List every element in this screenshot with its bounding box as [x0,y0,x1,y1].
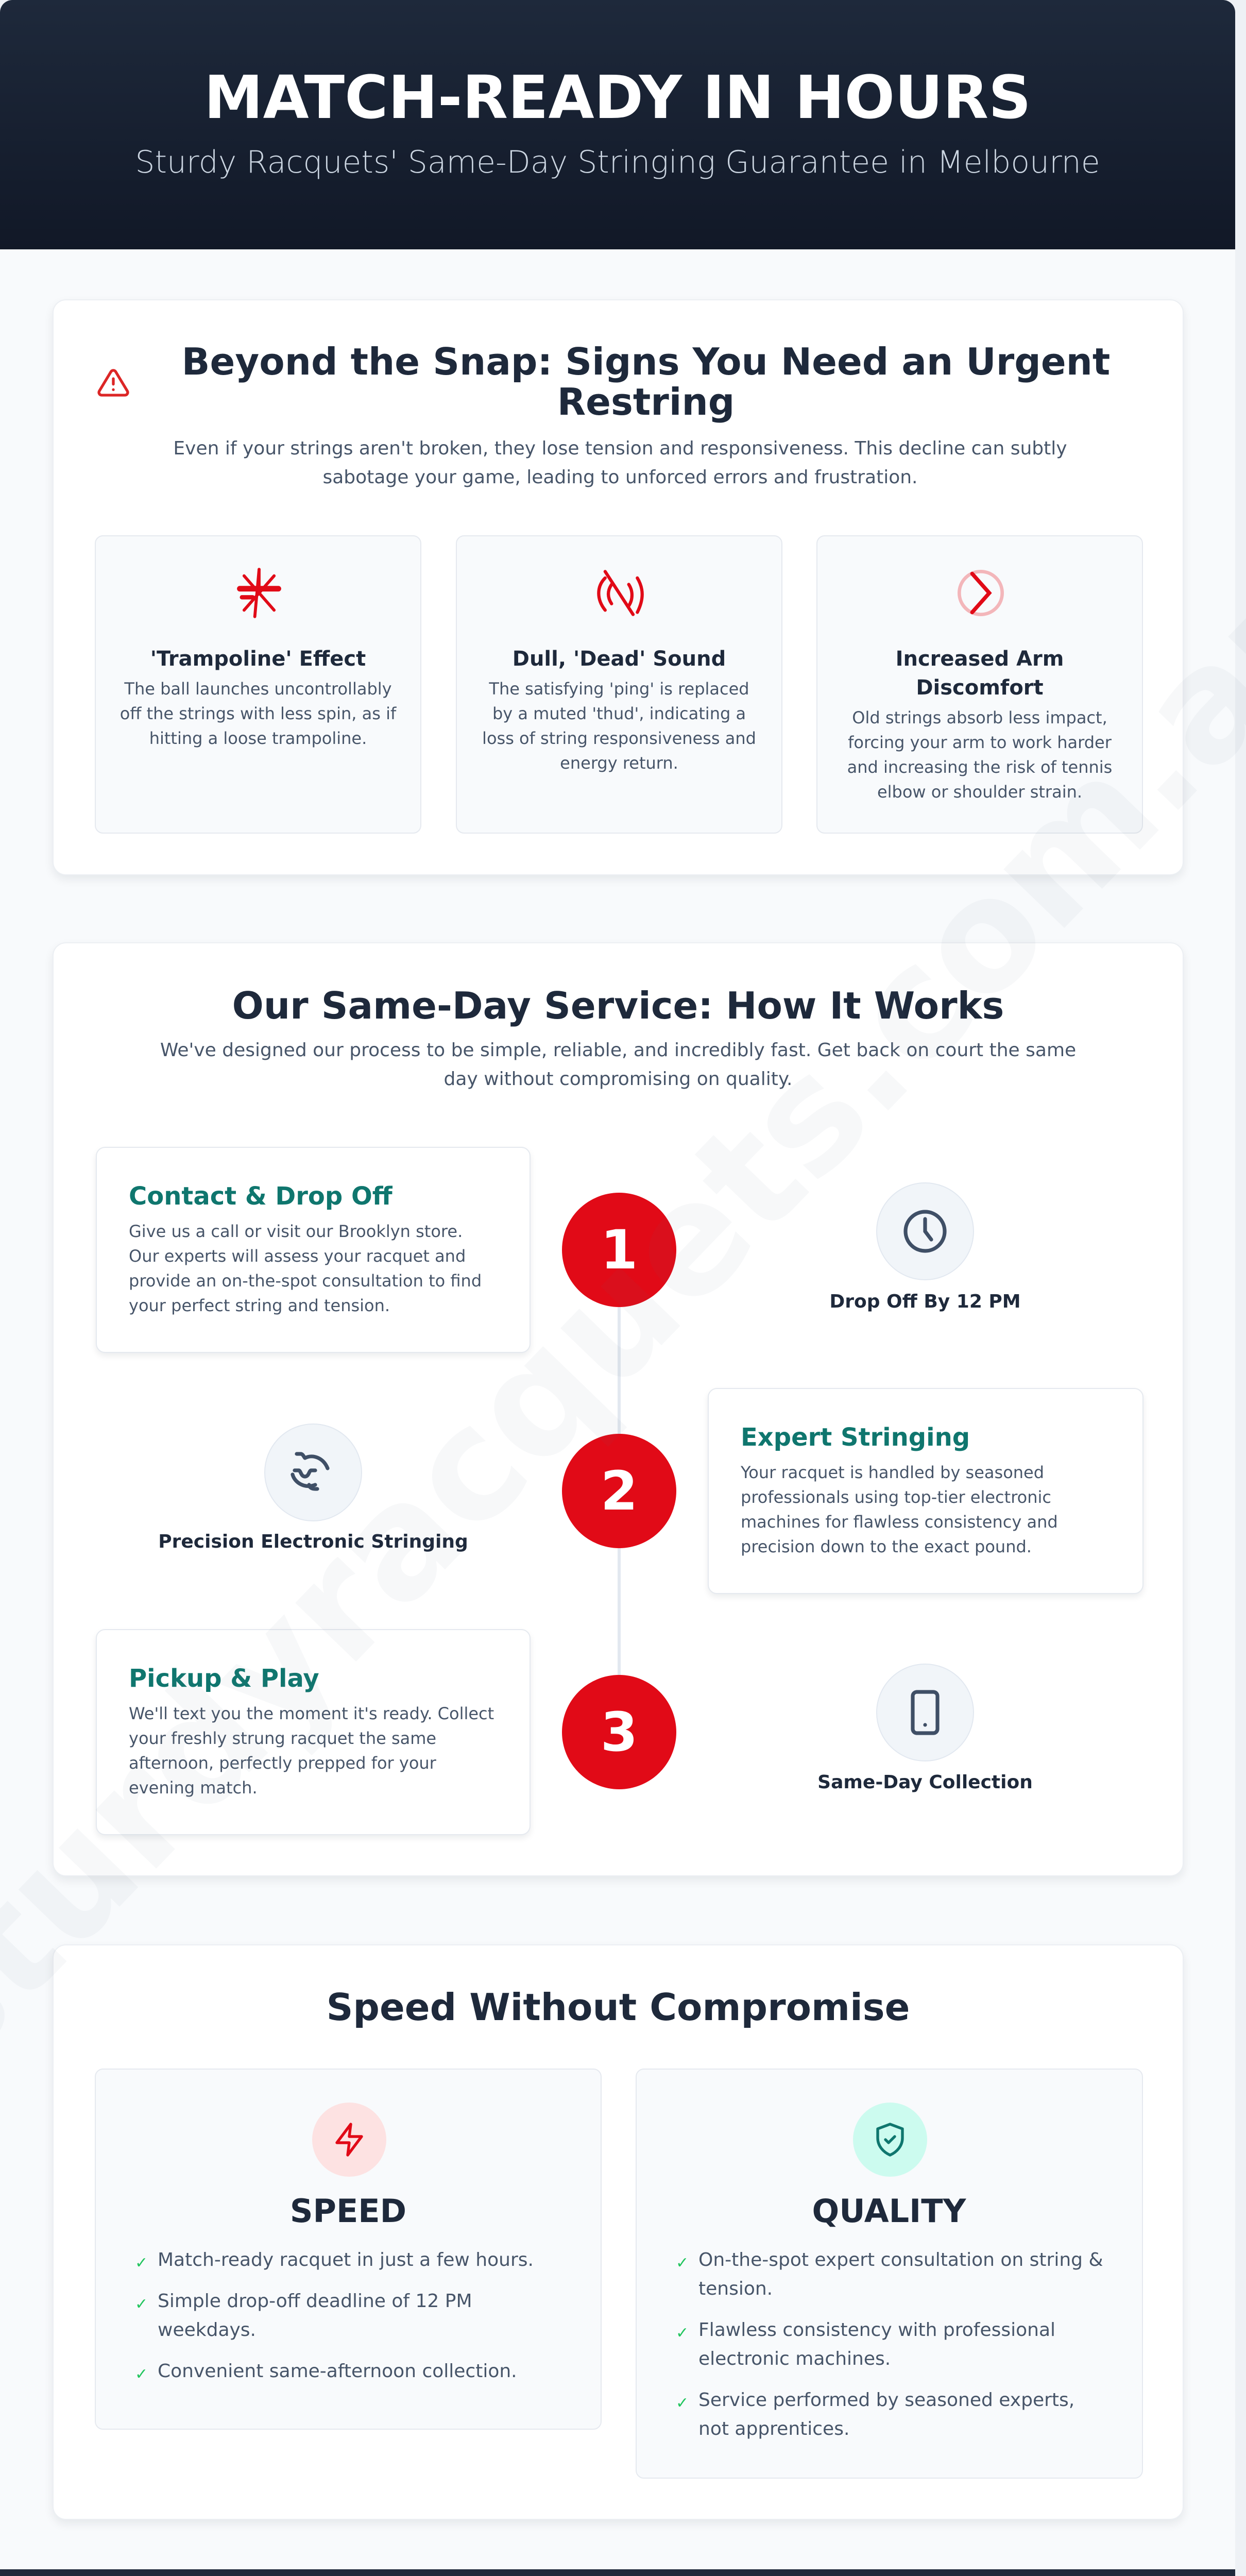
step number 1: 1 [601,1218,638,1281]
step 1 card: Give us a call or visit our Brooklyn store. Our experts will assess your racquet and provide an on-the-spot consultation to find your perfect string and tension. [129,1222,482,1315]
heading: Our Same-Day Service: How It Works [232,984,1004,1027]
step 3 card: We'll text you the moment it's ready. Collect your freshly strung racquet the same afternoon, perfectly prepped for your evening match. [129,1704,494,1798]
list: Service performed by seasoned experts, not apprentices. [698,2389,1074,2439]
list [678,2249,1103,2439]
step 2 card: Your racquet is handled by seasoned professionals using top-tier electronic machines for flawless consistency and precision down to the exact pound. [741,1463,1058,1556]
title: MATCH-READY IN HOURS [204,63,1031,132]
step 1 card [96,1147,531,1353]
description: The satisfying 'ping' is replaced by a muted 'thud', indicating a loss of string responsiveness and energy return. [482,679,756,773]
list: On-the-spot expert consultation on string & tension. [698,2249,1103,2299]
step number 2: 2 [601,1460,638,1522]
step 3 card: Pickup & Play [129,1664,319,1693]
header [0,0,1235,249]
timeline line [618,1252,621,1732]
sub-card: quality [636,2069,1143,2479]
subtitle: Sturdy Racquets' Same-Day Stringing Guarantee in Melbourne [135,144,1100,180]
intro text: We've designed our process to be simple, reliable, and incredibly fast. Get back on court the same day without compromising on quality. [160,1040,1076,1090]
heading: Speed Without Compromise [327,1986,910,2029]
icon: shield [853,2103,927,2177]
icon: clock [876,1182,974,1280]
label: drop off: Drop Off By 12 PM [829,1291,1021,1312]
icon: muted sound [597,570,644,616]
sub-card: arm discomfort [816,535,1143,834]
title: QUALITY [812,2192,966,2230]
description: The ball launches uncontrollably off the strings with less spin, as if hitting a loose trampoline. [120,679,396,748]
sub-card: trampoline [95,535,421,834]
title [896,647,1064,700]
list: Match-ready racquet in just a few hours. [158,2249,534,2270]
footer [0,2569,1235,2576]
title: Dull, 'Dead' Sound [513,647,726,671]
icon: phone [876,1664,974,1761]
icon: stringing [264,1423,362,1521]
step 1 card: Contact & Drop Off [129,1182,392,1211]
step 3 card [96,1629,531,1835]
step 2 card [708,1388,1143,1594]
title: Increased Arm [896,647,1064,671]
label: same-day: Same-Day Collection [817,1772,1033,1793]
title: Discomfort [916,676,1044,700]
icon: bolt [312,2103,386,2177]
panel: how it works [53,942,1184,1876]
icon: warning [97,369,129,397]
panel: signs you need restring [53,299,1184,875]
step number 2 [562,1434,676,1548]
label: precision: Precision Electronic Stringing [158,1531,468,1552]
step number 3 [562,1675,676,1789]
sub-card: speed [95,2069,602,2430]
step number 1 [562,1193,676,1307]
list: Flawless consistency with professional electronic machines. [698,2319,1055,2369]
step 2 card: Expert Stringing [741,1423,970,1452]
list: Simple drop-off deadline of 12 PM weekdays. [158,2291,472,2341]
heading: Beyond the Snap: Signs You Need an Urgent Restring [182,340,1110,423]
intro text: Even if your strings aren't broken, they lose tension and responsiveness. This decline can subtly sabotage your game, leading to unforced errors and frustration. [173,438,1067,488]
sub-card: dead sound [456,535,782,834]
icon: trampoline [237,568,281,618]
description: Old strings absorb less impact, forcing your arm to work harder and increasing the risk of tennis elbow or shoulder strain. [847,708,1112,802]
panel: speed without compromise [53,1944,1184,2520]
list [137,2249,534,2382]
title: 'Trampoline' Effect [150,647,366,671]
icon: arm [958,570,1004,616]
step number 3: 3 [601,1701,638,1764]
list: Convenient same-afternoon collection. [158,2361,517,2382]
title: SPEED [290,2192,406,2230]
